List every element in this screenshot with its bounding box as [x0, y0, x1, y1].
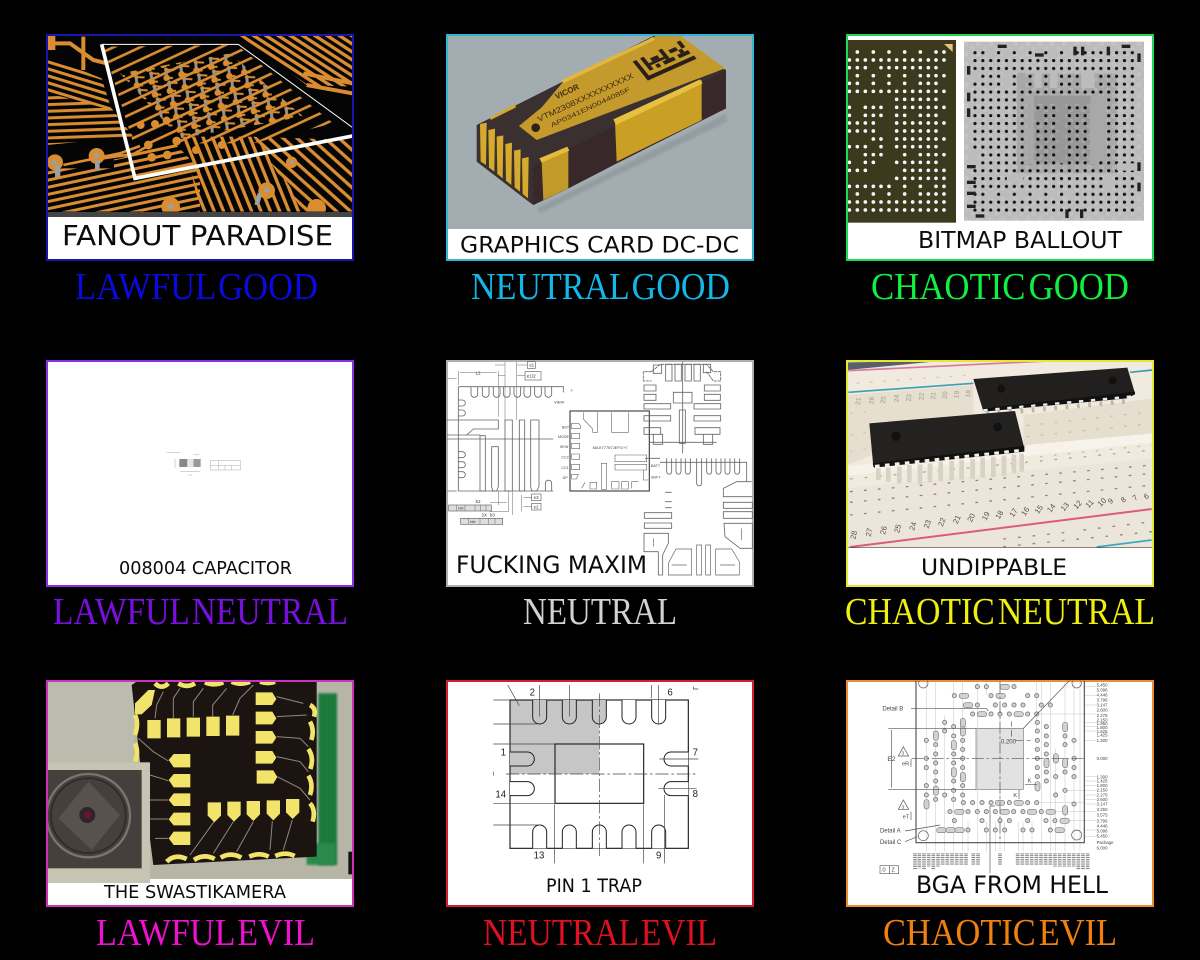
panel: chaotic evil [847, 678, 1153, 906]
image: DIP chips on breadboard: 27 [864, 527, 874, 537]
drawing labels: 2.600 [1097, 797, 1108, 802]
drawing labels: 2.275 [1097, 713, 1108, 718]
drawing: dimension callouts: e2 [534, 504, 539, 509]
heading: chaotic neutral: CHAOTIC NEUTRAL [845, 591, 1155, 633]
image: DIP chips on breadboard: 11 [1084, 498, 1096, 510]
drawing labels: 3 [901, 804, 904, 810]
caption: pin 1 trap: PIN 1 TRAP [546, 876, 642, 897]
image: Vicor power module: VICOR [554, 82, 581, 101]
drawing labels: eT [903, 814, 910, 820]
drawing: dimension callouts: e3 [534, 495, 539, 500]
panel: neutral good [447, 35, 753, 260]
drawing labels: Package [1097, 840, 1114, 845]
inset overlap onto caption band [48, 879, 150, 883]
pads: copper layout [135, 690, 299, 845]
panel: neutral evil [447, 681, 753, 906]
panel border [847, 361, 1153, 586]
shaded quadrant [510, 700, 599, 774]
caption: fucking maxim: FUCKING MAXIM [456, 551, 647, 579]
drawing: dimension callouts: bbb [470, 520, 476, 524]
image: QFN pin-1 drawing [493, 685, 698, 863]
panel: chaotic neutral [847, 360, 1153, 586]
heading: lawful good: LAWFUL GOOD [75, 266, 318, 308]
image: DIP chips on breadboard: 22 [936, 516, 948, 528]
inset: camera photo [47, 762, 150, 884]
image: DIP chips on breadboard: 22 [918, 392, 926, 401]
drawing: dimension callouts: bbb [458, 507, 464, 511]
drawing labels: K [1028, 778, 1032, 784]
image: Vicor power module: AP0341EN0044085F [550, 86, 632, 129]
ballout gaps [971, 73, 1105, 166]
image: camera module and pad layout [47, 681, 353, 884]
panel: neutral [447, 361, 753, 586]
caption band [48, 879, 352, 906]
panel: chaotic good [847, 35, 1153, 260]
panel: lawful good [47, 35, 353, 260]
image: DIP chips on breadboard: 19 [980, 510, 992, 522]
image: DIP chips on breadboard: 21 [951, 514, 963, 525]
center and dimension lines [880, 679, 1085, 874]
pin numbers: 8 [693, 789, 698, 800]
image: DIP chips on breadboard: 26 [868, 396, 876, 405]
drawing labels: 5.096 [1097, 828, 1108, 833]
pin numbers [495, 688, 698, 862]
drawing: center IC pinout: VIEW [554, 399, 564, 404]
caption: BGA from hell: BGA FROM HELL [916, 871, 1109, 899]
drawing: center IC pinout: MODE [558, 435, 570, 439]
panel border [447, 35, 753, 260]
image: tiny capacitor land pattern [167, 452, 240, 475]
drawing labels: Z [891, 868, 895, 874]
drawing: top-right land pattern [643, 362, 721, 453]
image: DIP chips on breadboard: 24 [893, 394, 901, 403]
drawing labels: 1.425 [1097, 733, 1108, 738]
caption: graphics card dc-dc: GRAPHICS CARD DC-DC [460, 232, 739, 258]
drawing labels [880, 683, 1114, 874]
heading: lawful neutral: LAWFUL NEUTRAL [53, 591, 348, 633]
drawing labels: 5.450 [1097, 834, 1108, 839]
drawing labels: 1.300 [1097, 738, 1108, 743]
image: DIP chips on breadboard: 28 [848, 530, 859, 540]
caption: undippable: UNDIPPABLE [921, 555, 1067, 581]
image: DIP chips on breadboard: 16 [1019, 505, 1031, 517]
heading: neutral good: NEUTRAL GOOD [471, 266, 730, 308]
drawing: center IC pinout: x [571, 389, 573, 393]
package outline [916, 678, 1084, 843]
center and dimension lines [493, 685, 698, 863]
drawing labels: 4.446 [1097, 824, 1108, 829]
drawing: center IC pinout: BST [562, 425, 570, 429]
drawing: center IC pinout: CC2 [561, 455, 569, 459]
drawing: dimension callouts [449, 362, 541, 524]
panel border [47, 35, 353, 260]
elongated pads [924, 684, 1069, 833]
panel background [447, 361, 753, 586]
image: DIP chips on breadboard: 23 [906, 394, 913, 402]
ball field [926, 687, 1074, 830]
drawing: dimension callouts: e1/2 [527, 374, 536, 379]
image: DIP chips on breadboard: 9 [1106, 496, 1115, 506]
thermal pad [976, 728, 1023, 789]
rotated axis values [915, 853, 1088, 870]
drawing labels: 3.147 [1097, 802, 1108, 807]
caption: the swastikamera: THE SWASTIKAMERA [103, 882, 287, 903]
image: DIP chips on breadboard: 15 [1033, 503, 1045, 516]
drawing: dimension callouts: e1 [529, 362, 535, 367]
drawing labels: 5.450 [1097, 683, 1108, 688]
drawing labels: 3.575 [1097, 813, 1108, 818]
drawing labels: .0 [881, 868, 886, 874]
image: DIP chips on breadboard: 7 [1131, 493, 1140, 503]
panel background [47, 361, 353, 586]
image: Vicor power module: VTM2308XXXXXXXXXX [536, 71, 636, 124]
heading: lawful evil: LAWFUL EVIL [96, 912, 315, 954]
drawing: center IC pinout: DP [563, 476, 568, 480]
data matrix [633, 40, 697, 80]
drawing labels: 2.600 [1097, 707, 1108, 712]
drawing: center IC pinout: CC1 [561, 466, 569, 470]
drawing: left package outline [447, 362, 563, 515]
drawing labels: 0.000 [1097, 756, 1108, 761]
drawing: center IC pinout: MAX77757JEFG+7 [593, 446, 628, 450]
image: DIP chips on breadboard: 21 [855, 397, 863, 405]
drawing labels: 3 [901, 750, 904, 756]
drawing: center IC pinout [554, 389, 661, 491]
drawing labels: 5.096 [1097, 688, 1108, 693]
drawing labels: 2.150 [1097, 788, 1108, 793]
traces [138, 685, 310, 855]
drawing labels: 1.800 [1097, 725, 1108, 730]
drawing: dimension callouts: L2 [476, 370, 481, 375]
image: DIP chips on breadboard: 25 [892, 523, 903, 534]
strip: board edge [47, 212, 353, 218]
drawing labels: 0.200 [1001, 739, 1017, 745]
caption band [447, 229, 753, 260]
image: DIP chips on breadboard: 24 [907, 520, 919, 532]
panel: lawful evil [47, 681, 353, 906]
pin numbers: 1 [501, 747, 506, 758]
drawing labels: Detail A [880, 829, 901, 835]
caption band [47, 217, 353, 260]
drawing: center IC pinout: SNFT [651, 475, 661, 479]
drawing labels: 1.950 [1097, 721, 1108, 726]
drawing: dimension callouts: 2X [482, 512, 487, 517]
image: DIP chips on breadboard [847, 360, 1152, 548]
panel: lawful neutral [47, 361, 353, 586]
panel background [447, 681, 753, 906]
drawing: bottom-right QFN outline [644, 458, 752, 575]
image: DIP chips on breadboard: 21 [930, 392, 938, 400]
image: DIP chips on breadboard: 23 [922, 519, 933, 530]
pins [510, 700, 688, 848]
drawing labels: 1.425 [1097, 778, 1108, 783]
package outline [510, 700, 688, 848]
panel background [847, 681, 1153, 906]
pin numbers: 9 [656, 851, 661, 862]
exposed pad [555, 744, 644, 803]
drawing: dimension callouts: b3 [490, 512, 495, 517]
drawing labels: E2 [887, 756, 896, 763]
image: DIP chips on breadboard: 26 [878, 525, 889, 535]
pin numbers: 2 [530, 688, 535, 699]
chip: front DIP [869, 411, 1024, 484]
caption: fanout paradise: FANOUT PARADISE [62, 221, 333, 252]
drawing: center IC pinout: KEW [560, 445, 569, 449]
image: DIP chips on breadboard: 8 [1119, 495, 1128, 505]
heading: chaotic evil: CHAOTIC EVIL [883, 912, 1117, 954]
drawing labels: 4.446 [1097, 693, 1108, 698]
drawing labels: Detail B [882, 706, 903, 712]
drawing: dimension callouts: b2 [476, 499, 481, 504]
drawing: center IC pinout: BATT [651, 464, 661, 468]
image: DIP chips on breadboard: 13 [1059, 501, 1071, 513]
drawing labels: 3.147 [1097, 703, 1108, 708]
image: DIP chips on breadboard: 18 [993, 509, 1005, 521]
image: DIP chips on breadboard: 6 [1142, 491, 1151, 501]
lead lines [926, 682, 1097, 852]
image: DIP chips on breadboard: 10 [1096, 496, 1108, 508]
drawing labels: 1.800 [1097, 783, 1108, 788]
pin numbers: 14 [495, 789, 507, 800]
drawing labels: 2.275 [1097, 793, 1108, 798]
image: DIP chips on breadboard: 17 [1007, 507, 1020, 519]
drawing labels: K [1013, 793, 1017, 799]
image: DIP chips on breadboard: 20 [942, 391, 949, 399]
heading: neutral evil: NEUTRAL EVIL [483, 912, 717, 954]
image: DIP chips on breadboard: 20 [965, 512, 977, 524]
drawing labels: 1.625 [1097, 729, 1108, 734]
pin numbers: 7 [693, 747, 698, 758]
image: DIP chips on breadboard: 18 [965, 390, 973, 398]
image: mashup of Maxim package drawings [447, 362, 752, 575]
image: DIP chips on breadboard: 19 [953, 390, 961, 399]
drawing labels: 2.150 [1097, 717, 1108, 722]
image: DIP chips on breadboard: 25 [880, 396, 888, 404]
chip: back DIP [973, 368, 1135, 414]
pin numbers: 6 [667, 688, 673, 699]
image: DIP chips on breadboard: 14 [1045, 501, 1058, 514]
pads: castellations [135, 682, 315, 862]
caption band [848, 548, 1153, 586]
drawing labels: 1.300 [1097, 774, 1108, 779]
pin numbers: 13 [534, 851, 544, 862]
caption: 008004 capacitor: 008004 CAPACITOR [119, 558, 292, 579]
heading: neutral: NEUTRAL [523, 591, 677, 633]
image: PCB fanout render [47, 35, 352, 218]
image: DIP chips on breadboard: 12 [1071, 499, 1084, 511]
caption: bitmap ballout: BITMAP BALLOUT [918, 228, 1123, 254]
drawing labels: eR [902, 761, 909, 767]
drawing labels: 3.796 [1097, 697, 1108, 702]
image: BGA package drawing [880, 678, 1114, 874]
panel background [847, 35, 1153, 260]
panel border [47, 681, 353, 906]
drawing labels: Detail C [880, 840, 902, 846]
image: bitmap ball grid photo and x-ray [847, 40, 1144, 223]
panel border [847, 35, 1153, 260]
drawing labels: 3.796 [1097, 818, 1108, 823]
image: Vicor power module [447, 35, 753, 229]
heading: chaotic good: CHAOTIC GOOD [871, 266, 1129, 308]
drawing labels: 3.250 [1097, 807, 1108, 812]
drawing labels: 6.000 [1097, 845, 1108, 850]
